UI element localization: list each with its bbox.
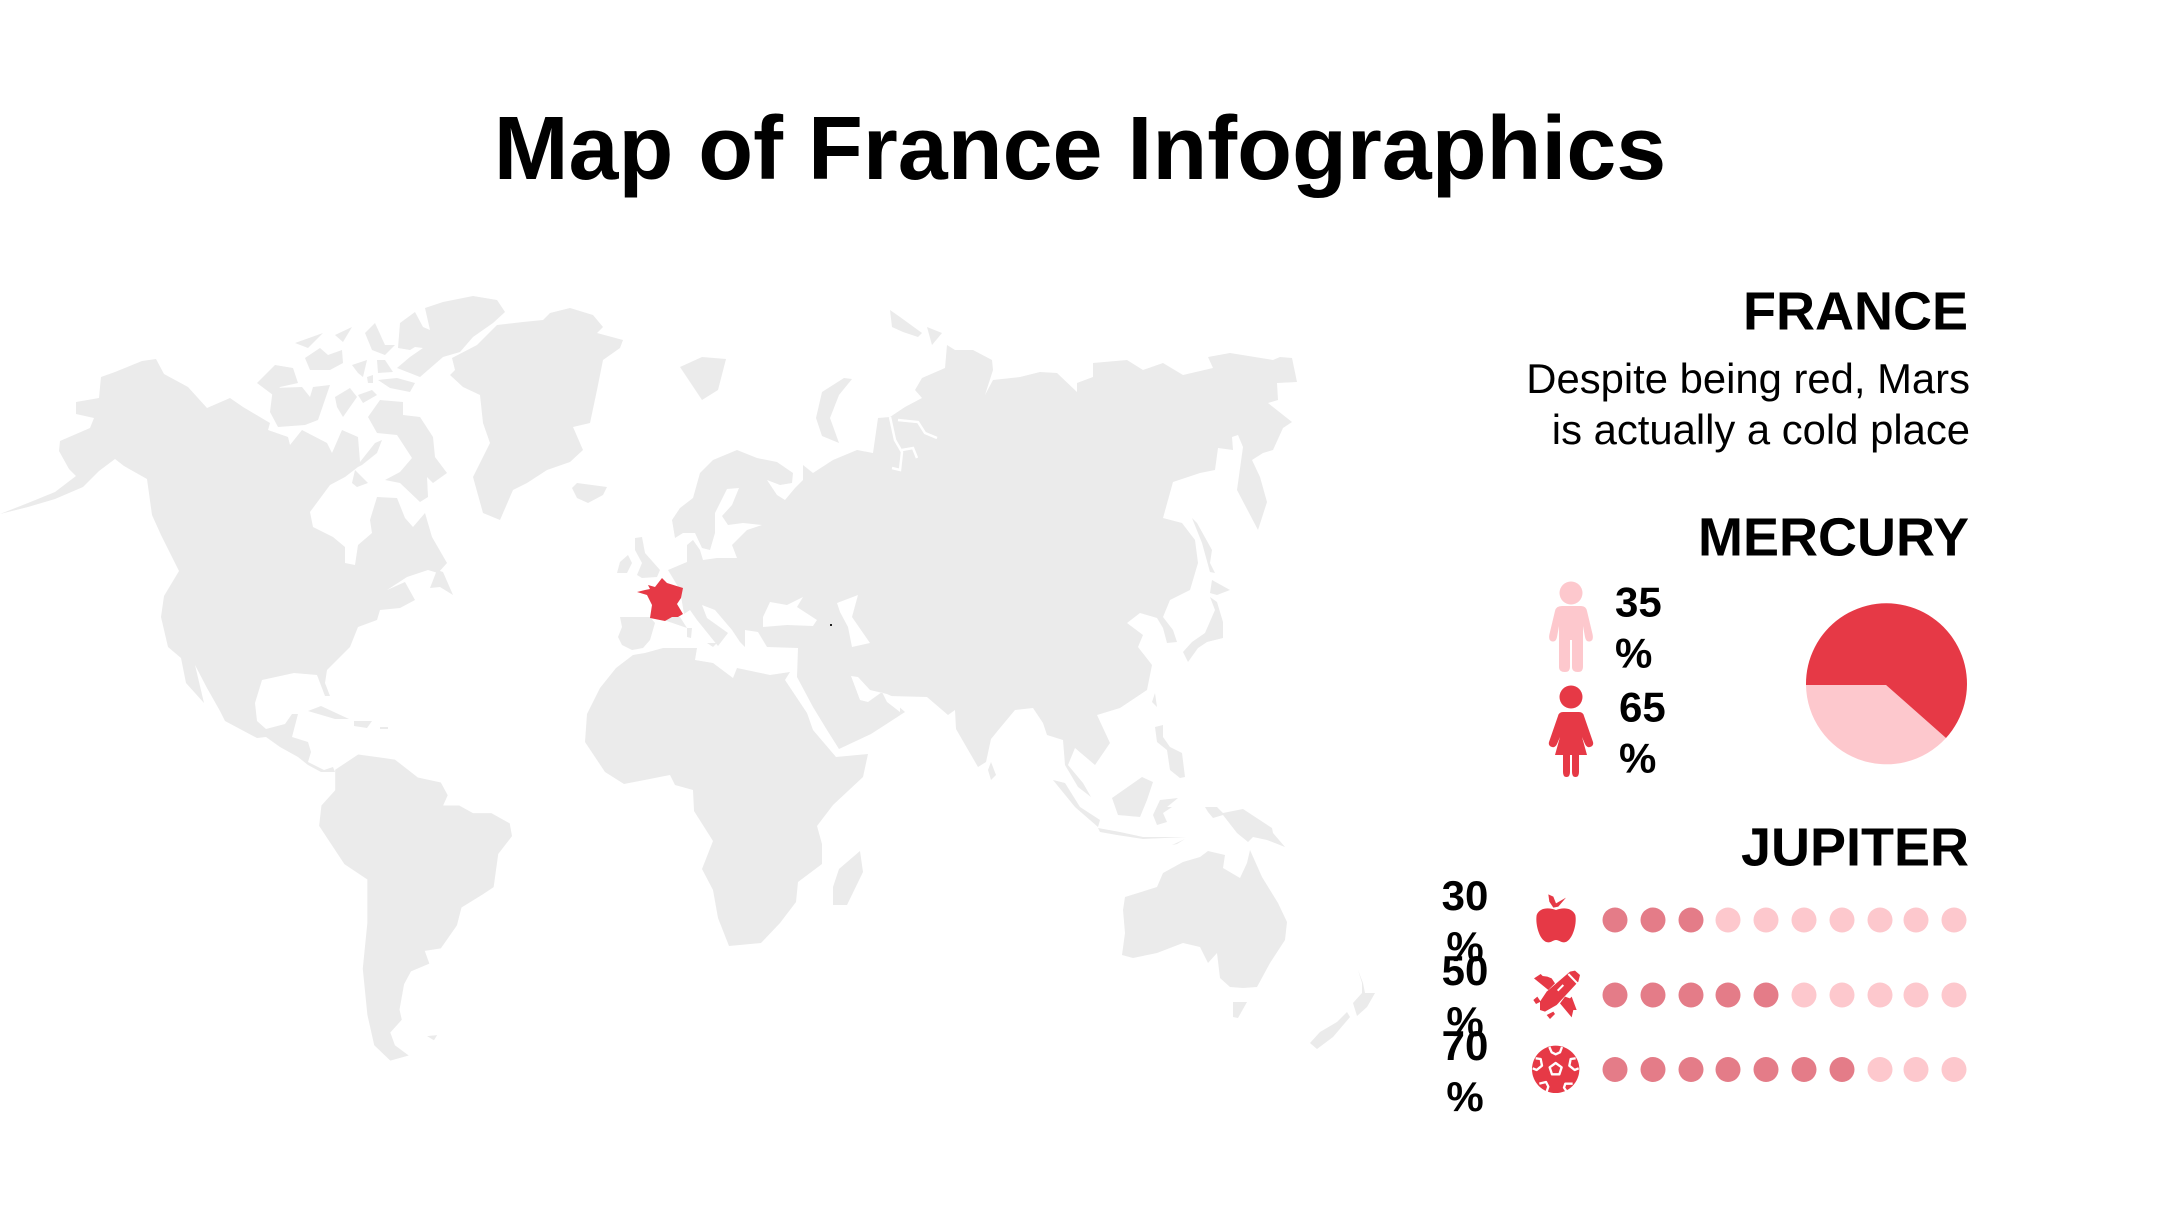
pie chart <box>1806 603 1967 764</box>
title: Map of France Infographics <box>494 99 1666 199</box>
section: France text <box>1526 282 1970 453</box>
dot row: 30 percent <box>1602 908 1966 932</box>
icon: apple <box>1536 894 1576 942</box>
icon: soccer ball <box>1532 1046 1579 1093</box>
heading: Jupiter: JUPITER <box>1741 818 1969 878</box>
label: 70 percent: % <box>1446 1073 1484 1120</box>
label: 35 percent: 35 <box>1615 578 1662 626</box>
pie slice: light <box>1806 685 1946 764</box>
southeast asia and oceania <box>1053 725 1375 1049</box>
dot row: 70 percent <box>1602 1057 1966 1082</box>
heading: Mercury: MERCURY <box>1698 508 1969 568</box>
section: Jupiter <box>1442 818 1969 1120</box>
description: Despite being red, Mars <box>1526 355 1970 402</box>
south america <box>319 754 512 1061</box>
africa and madagascar <box>585 648 868 946</box>
north america and arctic <box>0 296 623 772</box>
stray dot <box>830 624 832 626</box>
world map <box>0 296 1375 1061</box>
label: 35 percent: % <box>1615 630 1652 676</box>
icon: man <box>1549 582 1593 672</box>
label: 65 percent: 65 <box>1619 684 1666 730</box>
inland seas <box>763 417 937 712</box>
europe and asia <box>617 310 1297 797</box>
France highlighted <box>637 578 683 621</box>
label: 50 percent: 50 <box>1442 947 1488 994</box>
label: 70 percent: 70 <box>1442 1022 1488 1069</box>
label: 30 percent: 30 <box>1442 872 1488 919</box>
label: 30 percent: % <box>1446 923 1484 970</box>
icon: woman <box>1549 686 1593 777</box>
pie slice: dark <box>1806 603 1967 738</box>
label: 50 percent: % <box>1446 998 1484 1045</box>
label: 65 percent: % <box>1619 734 1656 782</box>
heading: France: FRANCE <box>1743 282 1968 342</box>
icon: airplane <box>1533 971 1580 1019</box>
description: is actually a cold place <box>1552 406 1970 453</box>
dot row: 50 percent <box>1602 982 1966 1008</box>
section: Mercury <box>1549 508 1969 782</box>
